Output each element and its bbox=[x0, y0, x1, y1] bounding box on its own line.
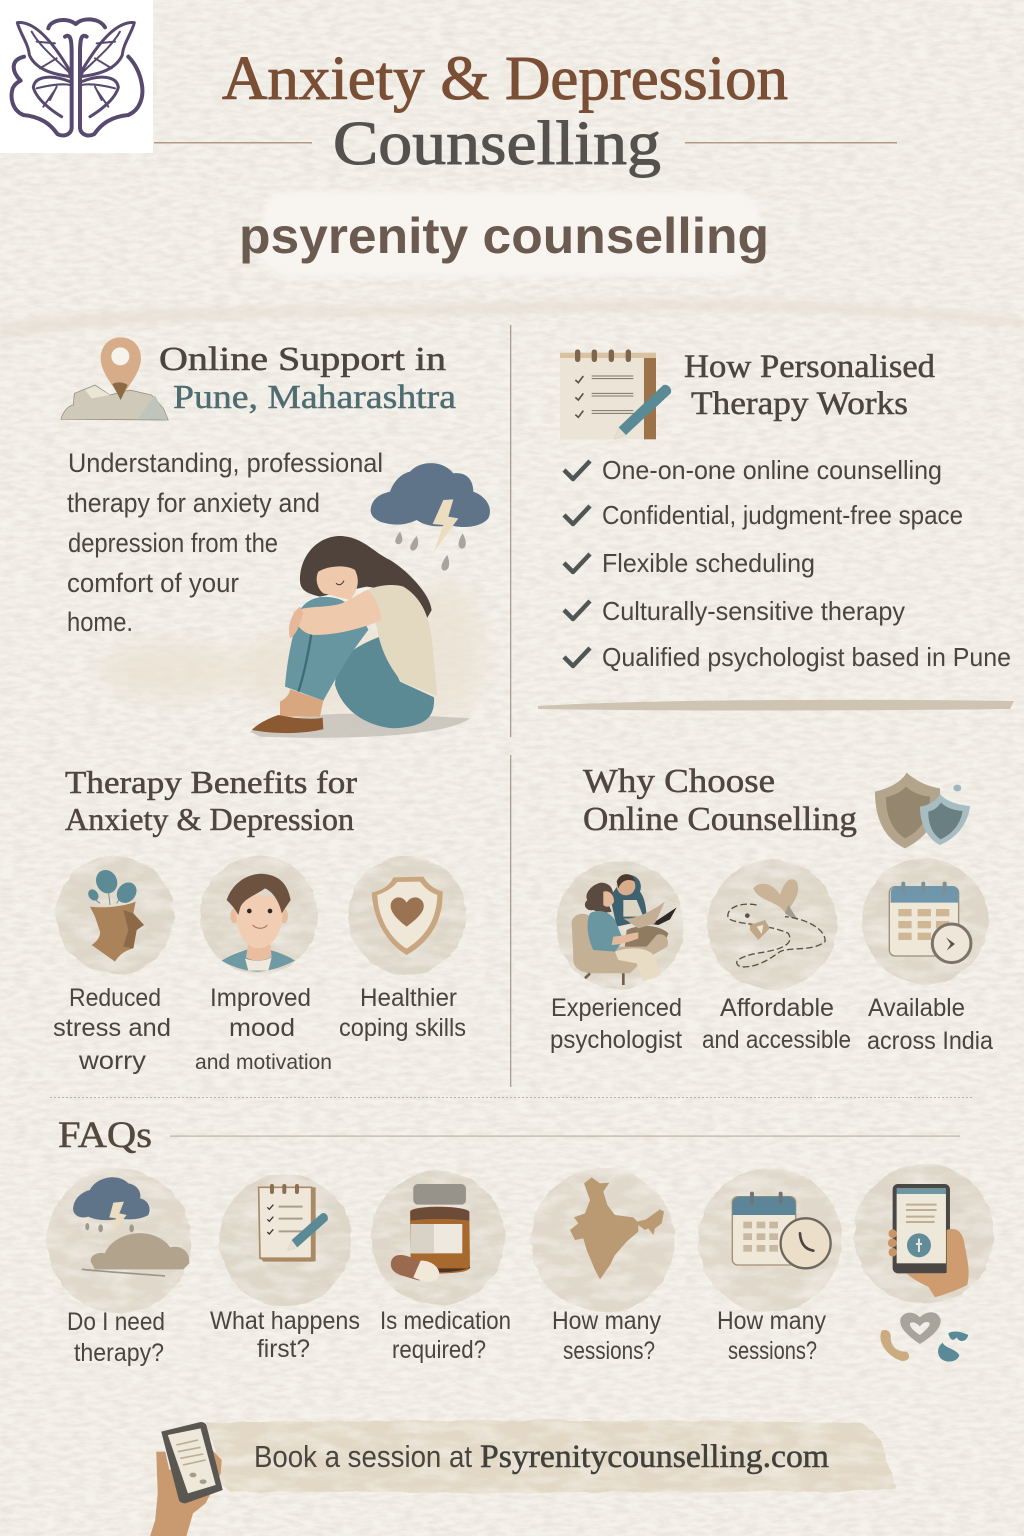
item: improved mood: Improved bbox=[210, 984, 311, 1012]
item: improved mood bbox=[195, 856, 332, 1074]
faq: do I need therapy: therapy? bbox=[74, 1339, 164, 1367]
faq: how many sessions, india map: How many bbox=[552, 1307, 661, 1335]
heading: why choose: Online Counselling bbox=[583, 801, 857, 838]
heading: online support bbox=[159, 341, 456, 416]
text: intro paragraph bbox=[67, 448, 383, 637]
watercolor wash behind figure bbox=[100, 580, 485, 720]
item: improved mood: and motivation bbox=[195, 1051, 332, 1074]
panel: therapy benefits bbox=[53, 764, 466, 1075]
item: reduced stress bbox=[53, 856, 174, 1075]
checklist: Confidential, judgment-free space bbox=[602, 500, 963, 530]
item: experienced psychologist: psychologist bbox=[550, 1026, 682, 1054]
faq: what happens first bbox=[210, 1174, 360, 1363]
front leg bbox=[285, 597, 368, 701]
item: healthier coping: Healthier bbox=[360, 984, 457, 1012]
title: Counselling bbox=[333, 110, 661, 178]
checklist: One-on-one online counselling bbox=[602, 455, 942, 485]
cta text bbox=[254, 1439, 829, 1475]
title: Anxiety & Depression bbox=[222, 45, 788, 113]
faq: do I need therapy bbox=[47, 1169, 191, 1367]
logo: butterfly brain bbox=[0, 0, 153, 153]
checklist: Qualified psychologist based in Pune bbox=[602, 642, 1011, 672]
heading: therapy benefits bbox=[65, 764, 357, 837]
faq: is medication required bbox=[371, 1171, 511, 1364]
cta text: Book a session at bbox=[254, 1439, 472, 1474]
faq: do I need therapy: Do I need bbox=[67, 1308, 165, 1336]
icons: phone, heart, chat bbox=[880, 1312, 968, 1362]
panel: FAQs bbox=[47, 1115, 994, 1367]
panel: online support bbox=[61, 337, 490, 738]
title bbox=[154, 45, 897, 178]
item: healthier coping bbox=[339, 856, 466, 1042]
icon: hand with phone bbox=[150, 1422, 223, 1536]
checklist: Culturally-sensitive therapy bbox=[602, 596, 905, 626]
heading: FAQs: FAQs bbox=[58, 1115, 152, 1156]
icon: shields bbox=[875, 773, 970, 848]
wash band bbox=[0, 299, 1024, 340]
item: reduced stress: worry bbox=[78, 1047, 147, 1075]
item: experienced psychologist: Experienced bbox=[551, 994, 682, 1022]
item: reduced stress: Reduced bbox=[69, 984, 161, 1012]
icon: notepad and pen bbox=[560, 349, 671, 439]
checklist: Flexible scheduling bbox=[602, 548, 815, 578]
item: improved mood: mood bbox=[229, 1014, 295, 1042]
heading: online support: Pune, Maharashtra bbox=[173, 379, 456, 416]
faq: how many sessions, calendar clock: sessions? bbox=[728, 1337, 817, 1365]
back of legs bbox=[335, 637, 434, 728]
illustration: sad woman under storm cloud bbox=[250, 463, 490, 738]
faq: is medication required: required? bbox=[392, 1336, 486, 1364]
item: affordable and accessible: and accessible bbox=[702, 1026, 851, 1054]
item: experienced psychologist bbox=[550, 861, 684, 1054]
faq: how many sessions, calendar clock: How many bbox=[717, 1307, 826, 1335]
heading: online support: Online Support in bbox=[159, 341, 446, 378]
hair bbox=[300, 536, 432, 620]
faq: what happens first: first? bbox=[257, 1335, 310, 1363]
section divider bbox=[50, 1096, 973, 1098]
cta text: Psyrenitycounselling.com bbox=[480, 1439, 829, 1475]
face bbox=[317, 566, 358, 600]
arm bbox=[293, 590, 382, 635]
heading: how personalised therapy works: How Personalised bbox=[684, 349, 936, 385]
heading: why choose bbox=[583, 763, 857, 838]
item: reduced stress: stress and bbox=[53, 1014, 171, 1042]
faq: how many sessions, calendar clock bbox=[698, 1168, 842, 1365]
item: available across india: across India bbox=[867, 1027, 993, 1055]
panel dividers bbox=[510, 325, 511, 1087]
icon: map pin bbox=[61, 337, 168, 420]
subtitle: psyrenity counselling bbox=[239, 192, 769, 276]
heading: how personalised therapy works bbox=[684, 349, 936, 422]
text: intro paragraph: Understanding, professional bbox=[68, 448, 383, 478]
text: intro paragraph: comfort of your bbox=[67, 568, 239, 598]
item: available across india bbox=[862, 858, 993, 1055]
foot bbox=[280, 689, 323, 717]
checklist bbox=[564, 455, 1011, 672]
item: healthier coping: coping skills bbox=[339, 1014, 466, 1042]
text: intro paragraph: therapy for anxiety and bbox=[67, 488, 320, 518]
panel: how personalised therapy works bbox=[560, 349, 1011, 672]
brush divider bbox=[538, 700, 1014, 710]
faq: what happens first: What happens bbox=[210, 1307, 360, 1335]
faq: is medication required: Is medication bbox=[380, 1307, 511, 1335]
heading: therapy benefits: Anxiety & Depression bbox=[65, 801, 354, 837]
panel: why choose online counselling bbox=[550, 763, 993, 1055]
text: intro paragraph: depression from the bbox=[68, 528, 278, 558]
faq: how many sessions, india map: sessions? bbox=[563, 1337, 655, 1365]
item: affordable and accessible: Affordable bbox=[720, 994, 834, 1022]
heading: how personalised therapy works: Therapy Works bbox=[691, 386, 908, 422]
item: available across india: Available bbox=[868, 994, 965, 1022]
faq: phone in hand bbox=[854, 1164, 994, 1304]
subtitle: psyrenity counselling: psyrenity counselling bbox=[239, 208, 769, 264]
item: affordable and accessible bbox=[702, 860, 851, 1054]
shirt bbox=[363, 585, 437, 696]
heading: therapy benefits: Therapy Benefits for bbox=[65, 764, 357, 800]
heading: why choose: Why Choose bbox=[583, 763, 775, 800]
faq: how many sessions, india map bbox=[531, 1168, 675, 1365]
call to action bbox=[150, 1420, 895, 1536]
brush banner bbox=[205, 1420, 895, 1493]
text: intro paragraph: home. bbox=[67, 607, 133, 637]
